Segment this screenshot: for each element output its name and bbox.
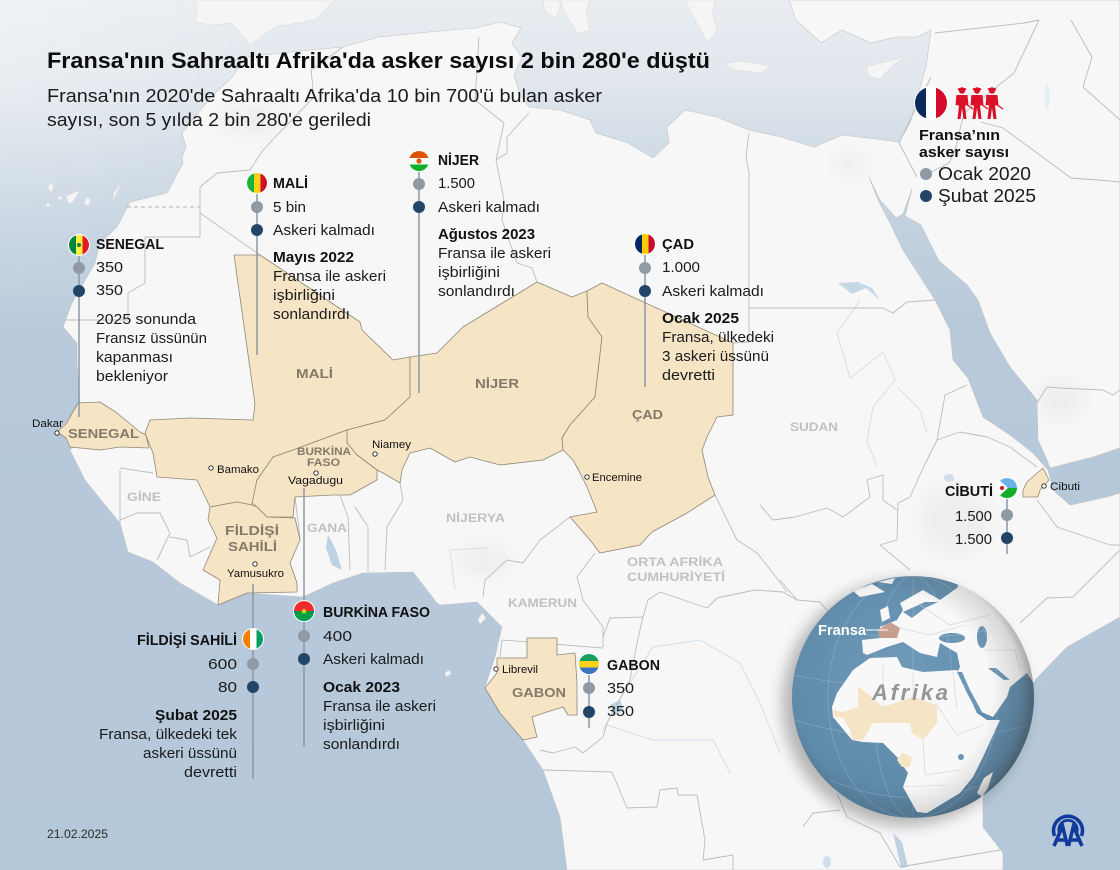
legend: France troop count: asker sayısı: [919, 144, 1009, 161]
country: Ivory Coast: [203, 502, 300, 605]
legend: France troop count: Şubat 2025: [938, 186, 1036, 206]
locator globe: [782, 570, 1040, 826]
country name labels on map: FİLDİŞİ: [225, 523, 279, 538]
terrain shading: [216, 105, 1084, 576]
flag: France: [914, 86, 947, 118]
callout: Senegal: bekleniyor: [96, 368, 168, 385]
callout: Senegal: Fransız üssünün: [96, 330, 207, 347]
country name labels on map: ÇAD: [632, 407, 663, 422]
country name labels on map: KAMERUN: [508, 596, 577, 610]
country name labels on map: MALİ: [296, 366, 333, 381]
flag: Burkina Faso: [293, 600, 315, 622]
country name labels on map: CUMHURİYETİ: [627, 569, 725, 584]
callout: Ivory Coast: devretti: [184, 764, 237, 781]
flag: Gabon: [579, 654, 599, 675]
callout: Burkina Faso: BURKİNA FASO: [323, 604, 430, 621]
capital city markers: Niamey: [372, 439, 412, 451]
callout: Niger: Fransa ile askeri: [438, 245, 551, 262]
country: Senegal: [57, 402, 149, 450]
callout: Mali: 5 bin: [273, 199, 306, 216]
country name labels on map: SENEGAL: [68, 426, 139, 441]
callout: Gabon: 350: [607, 703, 634, 720]
callout: Chad: [634, 233, 774, 387]
callout: Senegal: SENEGAL: [96, 237, 164, 253]
callout: Niger: 1.500: [438, 175, 475, 192]
land: Iberia: [196, 0, 335, 45]
callout: Chad: ÇAD: [662, 237, 694, 253]
callout: Djibouti: CİBUTİ: [945, 483, 993, 500]
globe highlighted countries: [832, 686, 937, 740]
flag: Djibouti: [997, 478, 1017, 499]
globe land: [832, 570, 1040, 813]
callout: Niger: NİJER: [438, 152, 479, 169]
callout: Niger: sonlandırdı: [438, 283, 515, 300]
callout: Niger: işbirliğini: [438, 264, 500, 281]
country name labels on map: FASO: [307, 457, 340, 469]
callout: Burkina Faso: sonlandırdı: [323, 736, 400, 753]
callout: Djibouti: 1.500: [955, 508, 992, 525]
globe seas: [903, 602, 1010, 760]
capital city markers: Bamako: [217, 464, 259, 476]
capital city markers: Yamusukro: [227, 568, 284, 580]
callout: Senegal: kapanması: [96, 349, 173, 366]
country name labels on map: BURKİNA: [297, 445, 351, 458]
callout: Chad: Askeri kalmadı: [662, 283, 764, 300]
callout: Niger: Askeri kalmadı: [438, 199, 540, 216]
subtitle: [47, 86, 602, 130]
callout: Senegal: 350: [96, 282, 123, 299]
callout: Chad: 3 askeri üssünü: [662, 348, 769, 365]
callout: Burkina Faso: Askeri kalmadı: [323, 651, 424, 668]
country name labels on map: GİNE: [127, 489, 161, 504]
country: Djibouti: [1023, 468, 1049, 497]
callout: Ivory Coast: 600: [208, 656, 237, 673]
callout: Gabon: [578, 653, 660, 728]
flag: Chad: [635, 234, 655, 255]
flag: Mali: [247, 173, 267, 194]
callout: Chad: devretti: [662, 367, 715, 384]
capital city markers: Vagadugu: [288, 475, 343, 487]
globe label: Fransa: Fransa: [818, 622, 867, 639]
flag: Senegal: [68, 234, 90, 256]
subtitle: sayısı, son 5 yılda 2 bin 280'e geriledi: [47, 110, 371, 130]
callout: Mali: Askeri kalmadı: [273, 222, 375, 239]
globe country borders: [883, 605, 1020, 787]
callout: Burkina Faso: 400: [323, 628, 352, 645]
callout: Burkina Faso: Ocak 2023: [323, 680, 400, 696]
callout: Senegal: 2025 sonunda: [96, 311, 197, 328]
legend: France troop count: Fransa’nın: [919, 127, 1000, 144]
callout: Ivory Coast: Fransa, ülkedeki tek: [99, 726, 238, 743]
callout: Mali: MALİ: [273, 175, 308, 192]
capital city markers: Encemine: [592, 472, 642, 484]
capital city markers: Dakar: [32, 418, 63, 430]
callout: Ivory Coast: 80: [218, 679, 237, 696]
country name labels on map: GABON: [512, 685, 566, 700]
legend: France troop count: Ocak 2020: [938, 164, 1031, 184]
callout: Chad: 1.000: [662, 259, 700, 276]
callout: Djibouti: [945, 477, 1018, 554]
land: southern Europe fragments: [46, 0, 905, 677]
title: Fransa'nın Sahraaltı Afrika'da asker sayısı 2 bin 280'e düştü: [47, 48, 710, 73]
country name labels on map: ORTA AFRİKA: [627, 554, 723, 569]
callout: Senegal: 350: [96, 259, 123, 276]
callout: Mali: [246, 172, 386, 355]
callout: Ivory Coast: Şubat 2025: [155, 708, 237, 724]
callout: Burkina Faso: [293, 488, 436, 753]
icon: agency logo: [1054, 816, 1082, 846]
country name labels on map: GANA: [307, 521, 347, 535]
callout: Gabon: GABON: [607, 658, 660, 674]
flag: Niger: [410, 151, 428, 172]
country name labels on map: NİJERYA: [446, 510, 505, 525]
callout: Mali: Fransa ile askeri: [273, 268, 386, 285]
rivers and lakes: [326, 84, 1050, 868]
country: Chad: [562, 283, 733, 553]
date: 21.02.2025: [47, 829, 108, 841]
flag: Ivory Coast: [242, 628, 264, 650]
icon: soldiers: [956, 87, 1003, 119]
highlighted countries: [57, 255, 1049, 740]
callout: Mali: sonlandırdı: [273, 306, 350, 323]
country: Burkina Faso: [252, 430, 377, 517]
subtitle: Fransa'nın 2020'de Sahraaltı Afrika'da 10 bin 700'ü bulan asker: [47, 86, 602, 106]
country name labels on map: [68, 366, 838, 700]
country name labels on map: SAHİLİ: [228, 539, 277, 554]
country: Niger: [347, 282, 602, 483]
callout: Gabon: 350: [607, 680, 634, 697]
callout: Mali: Mayıs 2022: [273, 250, 354, 266]
callout: Niger: [408, 150, 551, 393]
callout: Chad: Ocak 2025: [662, 311, 739, 327]
callout: Ivory Coast: FİLDİŞİ SAHİLİ: [137, 632, 237, 649]
capital city markers: [32, 418, 1080, 676]
capital city markers: Librevil: [502, 664, 538, 676]
country name labels on map: NİJER: [475, 376, 520, 391]
callout: Burkina Faso: Fransa ile askeri: [323, 698, 436, 715]
country: Mali: [145, 255, 410, 507]
callout: Burkina Faso: işbirliğini: [323, 717, 385, 734]
country name labels on map: SUDAN: [790, 420, 838, 434]
Red Sea and Gulf of Aden: [869, 177, 1120, 505]
globe grid lines: [794, 576, 1032, 818]
callout: Ivory Coast: [99, 584, 264, 781]
capital city markers: Cibuti: [1050, 481, 1080, 493]
callout: Djibouti: 1.500: [955, 531, 992, 548]
country: Gabon: [485, 638, 577, 740]
callout: Niger: Ağustos 2023: [438, 227, 535, 243]
callout: Ivory Coast: askeri üssünü: [143, 745, 237, 762]
globe label: Afrika: Afrika: [871, 680, 948, 705]
callout: Chad: Fransa, ülkedeki: [662, 329, 774, 346]
callout: Mali: işbirliğini: [273, 287, 335, 304]
callout: Senegal: [68, 234, 207, 417]
legend: France troop count: [914, 86, 1036, 206]
